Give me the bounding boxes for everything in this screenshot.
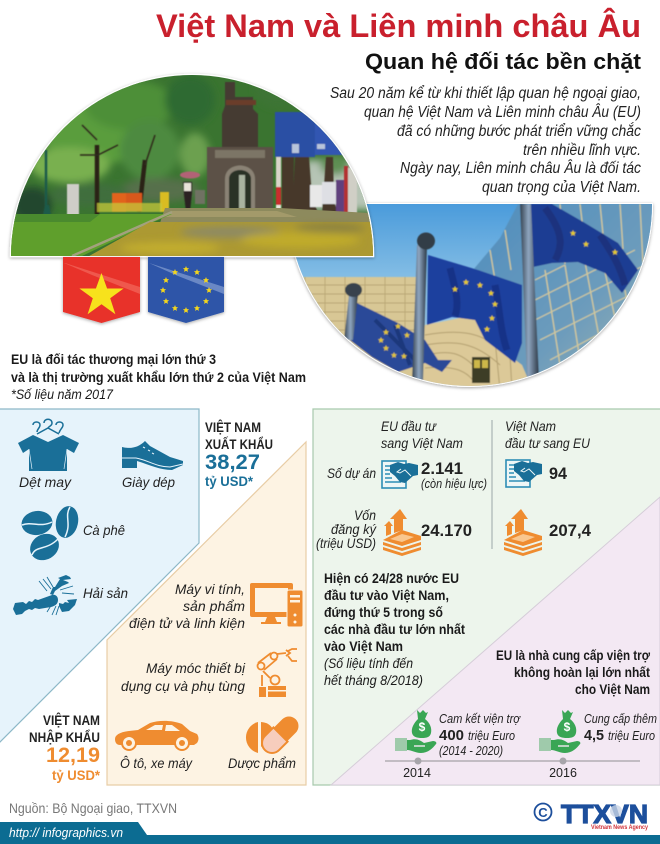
icon: medicine (246, 712, 303, 757)
icon: shirt (18, 419, 79, 471)
export figure: tỷ USD* (205, 473, 254, 489)
aid item 2014: 400 (439, 727, 464, 744)
pedestrian (183, 182, 192, 212)
investment note: (Số liệu tính đến (324, 656, 413, 671)
label: registered capital: (triệu USD) (316, 535, 376, 551)
export figure: 38,27 (205, 451, 260, 474)
panel: investment (313, 409, 660, 785)
subtitle: Quan hệ đối tác bền chặt (365, 49, 642, 74)
import figure: VIỆT NAM (43, 711, 100, 728)
footer band (0, 822, 660, 844)
export figure: VIỆT NAM (205, 418, 261, 435)
label: footwear: Giày dép (122, 474, 175, 490)
import figure: tỷ USD* (52, 767, 101, 783)
value: projects EU (421, 460, 487, 491)
aid heading (496, 648, 650, 697)
column heading: EU to Vietnam: EU đầu tư (381, 418, 437, 434)
icon: coffee beans (20, 504, 81, 565)
label: machinery: Máy móc thiết bị (146, 660, 246, 676)
aid item 2016 (584, 711, 657, 744)
aid heading: cho Việt Nam (575, 682, 650, 697)
trade summary text (11, 352, 306, 402)
beige curved lower (422, 317, 528, 386)
icon: money bag 2014 (395, 710, 436, 753)
logo: TTXVN: Vietnam News Agency (591, 825, 649, 831)
value: projects Vietnam: 94 (549, 465, 568, 483)
trade summary text: và là thị trường xuất khẩu lớn thứ 2 của Việt Nam (11, 370, 306, 385)
trees (94, 144, 148, 214)
intro paragraph: quan trọng của Việt Nam. (482, 179, 641, 196)
import figure: 12,19 (46, 744, 100, 767)
trade summary text: *Số liệu năm 2017 (11, 387, 113, 402)
timeline: 2014 (403, 766, 431, 780)
icon: money Vietnam (504, 509, 542, 556)
panel: imports (107, 442, 306, 785)
panel: exports (0, 409, 199, 743)
logo: TTXVN: TTXVN (561, 799, 648, 829)
icon: computer (250, 583, 303, 627)
timeline: 2016 (549, 766, 577, 780)
icon: handshake EU (382, 461, 418, 488)
export figure: XUẤT KHẨU (205, 435, 273, 452)
logo: TTXVN: C (538, 805, 548, 820)
poles (276, 157, 281, 187)
label: cars: Ô tô, xe máy (120, 755, 193, 771)
icon: robot arm (258, 649, 297, 697)
label: textiles: Dệt may (19, 474, 72, 490)
tower (222, 82, 258, 148)
panel: aid (331, 497, 660, 785)
flag: back (350, 303, 452, 372)
value: projects EU: 2.141 (421, 460, 463, 478)
label: coffee: Cà phê (83, 522, 125, 538)
ground (160, 208, 370, 223)
photo: EU flags at building (288, 204, 652, 395)
intro paragraph: Ngày nay, Liên minh châu Âu là đối tác (400, 160, 641, 177)
timeline (385, 758, 640, 780)
label: computers: sản phẩm (183, 598, 245, 614)
aid item 2014: (2014 - 2020) (439, 743, 503, 758)
label: computers: điện tử và linh kiện (129, 615, 245, 631)
label: registered capital: Vốn (354, 507, 376, 523)
icon: shoe (122, 441, 183, 470)
label: machinery: dụng cụ và phụ tùng (121, 678, 245, 694)
investment note: đầu tư vào Việt Nam, (324, 588, 449, 603)
investment note: Hiện có 24/28 nước EU (324, 571, 459, 586)
import figure (29, 711, 101, 783)
intro paragraph (330, 85, 641, 196)
export figure (205, 418, 273, 489)
label: pharmaceuticals: Dược phẩm (228, 755, 296, 771)
label: registered capital (316, 507, 377, 551)
aid item 2014: Cam kết viện trợ (439, 711, 521, 726)
beige building left (303, 276, 416, 376)
investment note: vào Việt Nam (324, 639, 403, 654)
column heading: Vietnam to EU (505, 418, 591, 451)
label: registered capital: đăng ký (331, 521, 377, 537)
label: projects: Số dự án (327, 465, 376, 481)
value: capital Vietnam: 207,4 (549, 522, 592, 540)
investment note: hết tháng 8/2018) (324, 673, 423, 688)
source: Nguồn: Bộ Ngoại giao, TTXVN (9, 800, 177, 816)
icon: lobster (13, 575, 77, 615)
photo: Hanoi street with tower (0, 70, 380, 260)
flag: front (528, 204, 638, 293)
import figure: NHẬP KHẨU (29, 728, 100, 745)
icon: money EU (383, 509, 421, 556)
aid item 2014: triệu Euro (468, 728, 515, 743)
column heading: EU to Vietnam: sang Việt Nam (381, 435, 463, 451)
aid item 2016: 4,5 (584, 727, 604, 744)
value: projects EU: (còn hiệu lực) (421, 477, 487, 491)
value: capital EU: 24.170 (421, 522, 472, 540)
column heading: EU to Vietnam (381, 418, 463, 451)
flag ribbon: EU (148, 257, 224, 323)
icon: car (115, 721, 198, 750)
icon: money bag 2016 (539, 710, 580, 753)
right trunks (282, 157, 339, 215)
footer band: http:// infographics.vn (9, 825, 123, 840)
kiosk and bins (67, 184, 79, 217)
investment note (324, 571, 465, 688)
investment note: các nhà đầu tư lớn nhất (324, 622, 465, 637)
glass facade (474, 204, 652, 376)
aid item 2014 (439, 711, 521, 758)
column heading: Vietnam to EU: đầu tư sang EU (505, 435, 591, 451)
label: computers: Máy vi tính, (175, 581, 245, 597)
label: machinery (121, 660, 246, 694)
column heading: Vietnam to EU: Việt Nam (505, 418, 556, 434)
icon: handshake Vietnam (506, 460, 542, 487)
flag ribbon: Vietnam (63, 257, 140, 323)
trade summary text: EU là đối tác thương mại lớn thứ 3 (11, 352, 216, 367)
investment note: đứng thứ 5 trong số (324, 605, 443, 620)
title: Việt Nam và Liên minh châu Âu (156, 8, 641, 44)
label: seafood: Hải sản (83, 585, 128, 601)
flag: middle (427, 255, 522, 363)
intro paragraph: trên nhiều lĩnh vực. (523, 142, 641, 159)
banner (275, 112, 315, 157)
label: computers (129, 581, 245, 631)
